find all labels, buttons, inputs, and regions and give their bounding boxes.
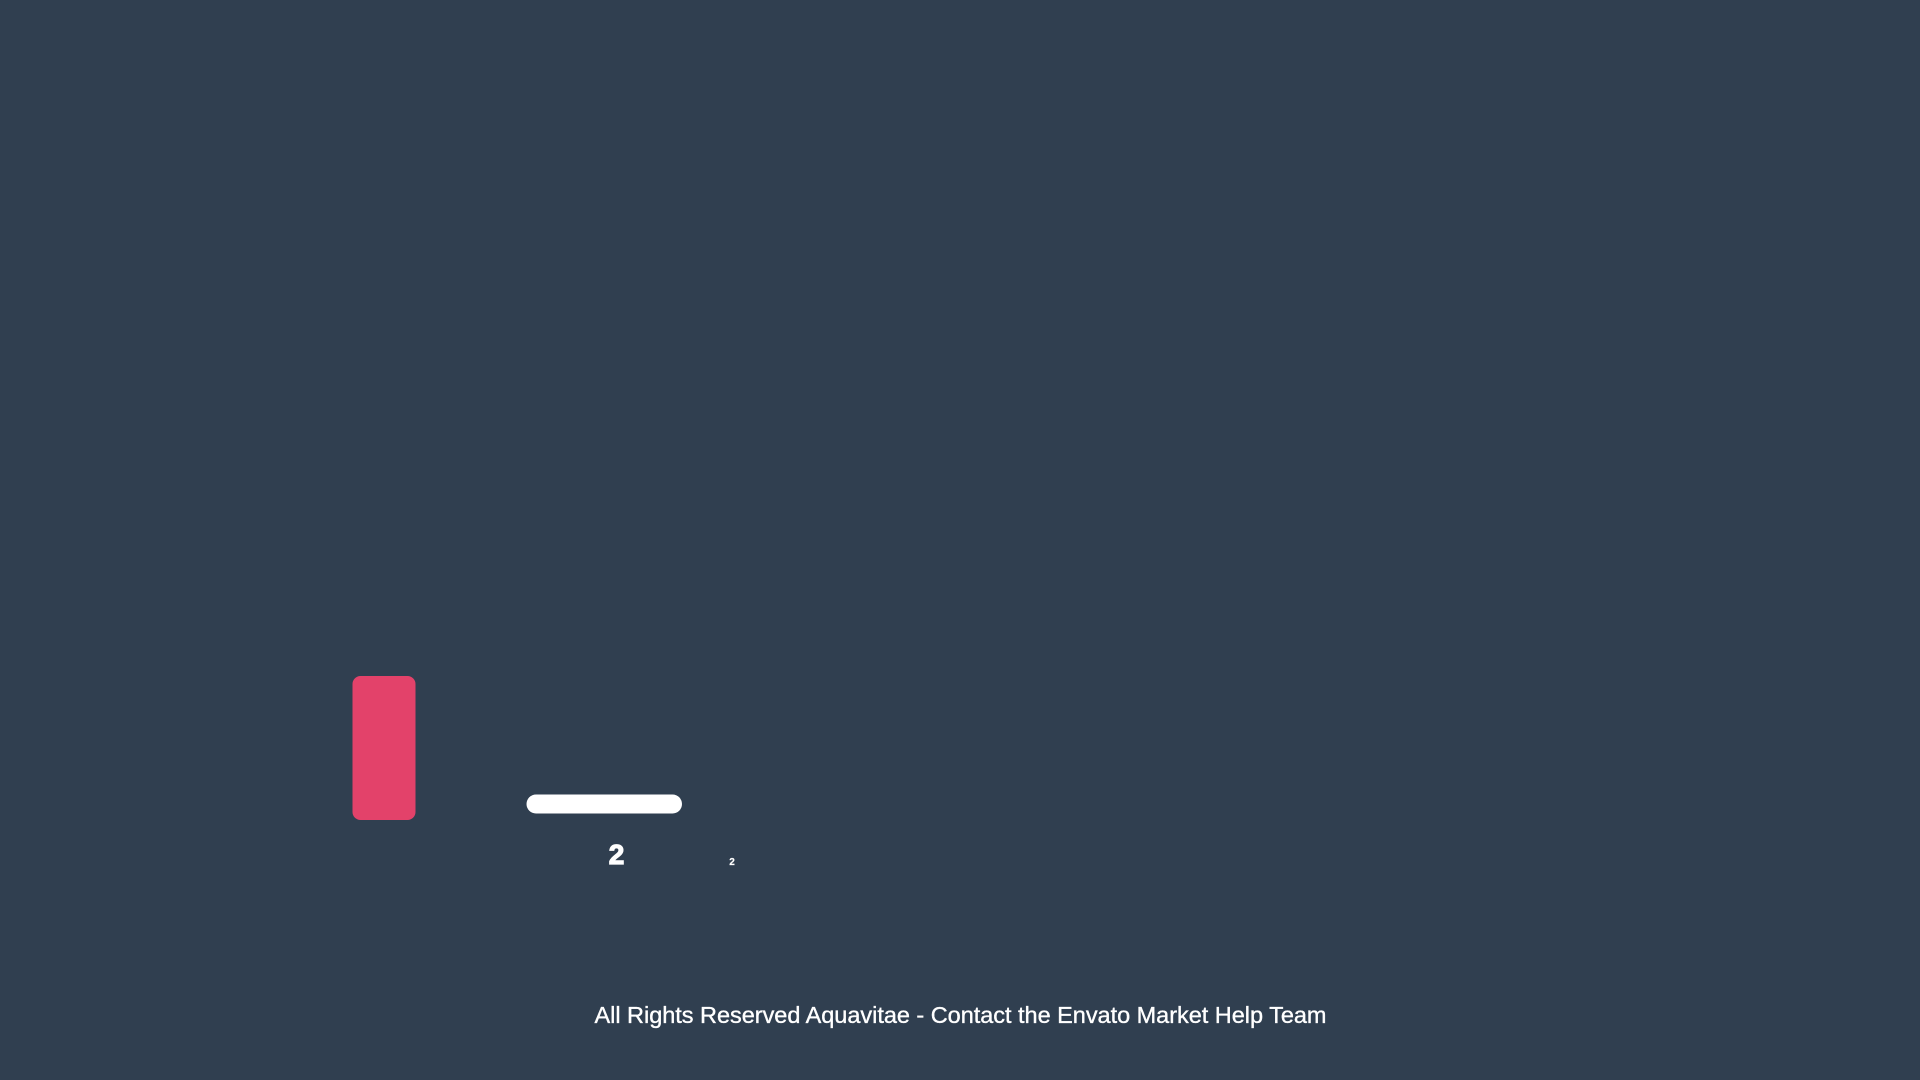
large number 2: 2 <box>609 839 624 870</box>
white pill bar <box>526 794 682 814</box>
red rounded rectangle <box>352 676 416 820</box>
footer copyright text: All Rights Reserved Aquavitae - Contact the Envato Market Help Team <box>594 1002 1326 1028</box>
small number 2: 2 <box>729 857 735 868</box>
